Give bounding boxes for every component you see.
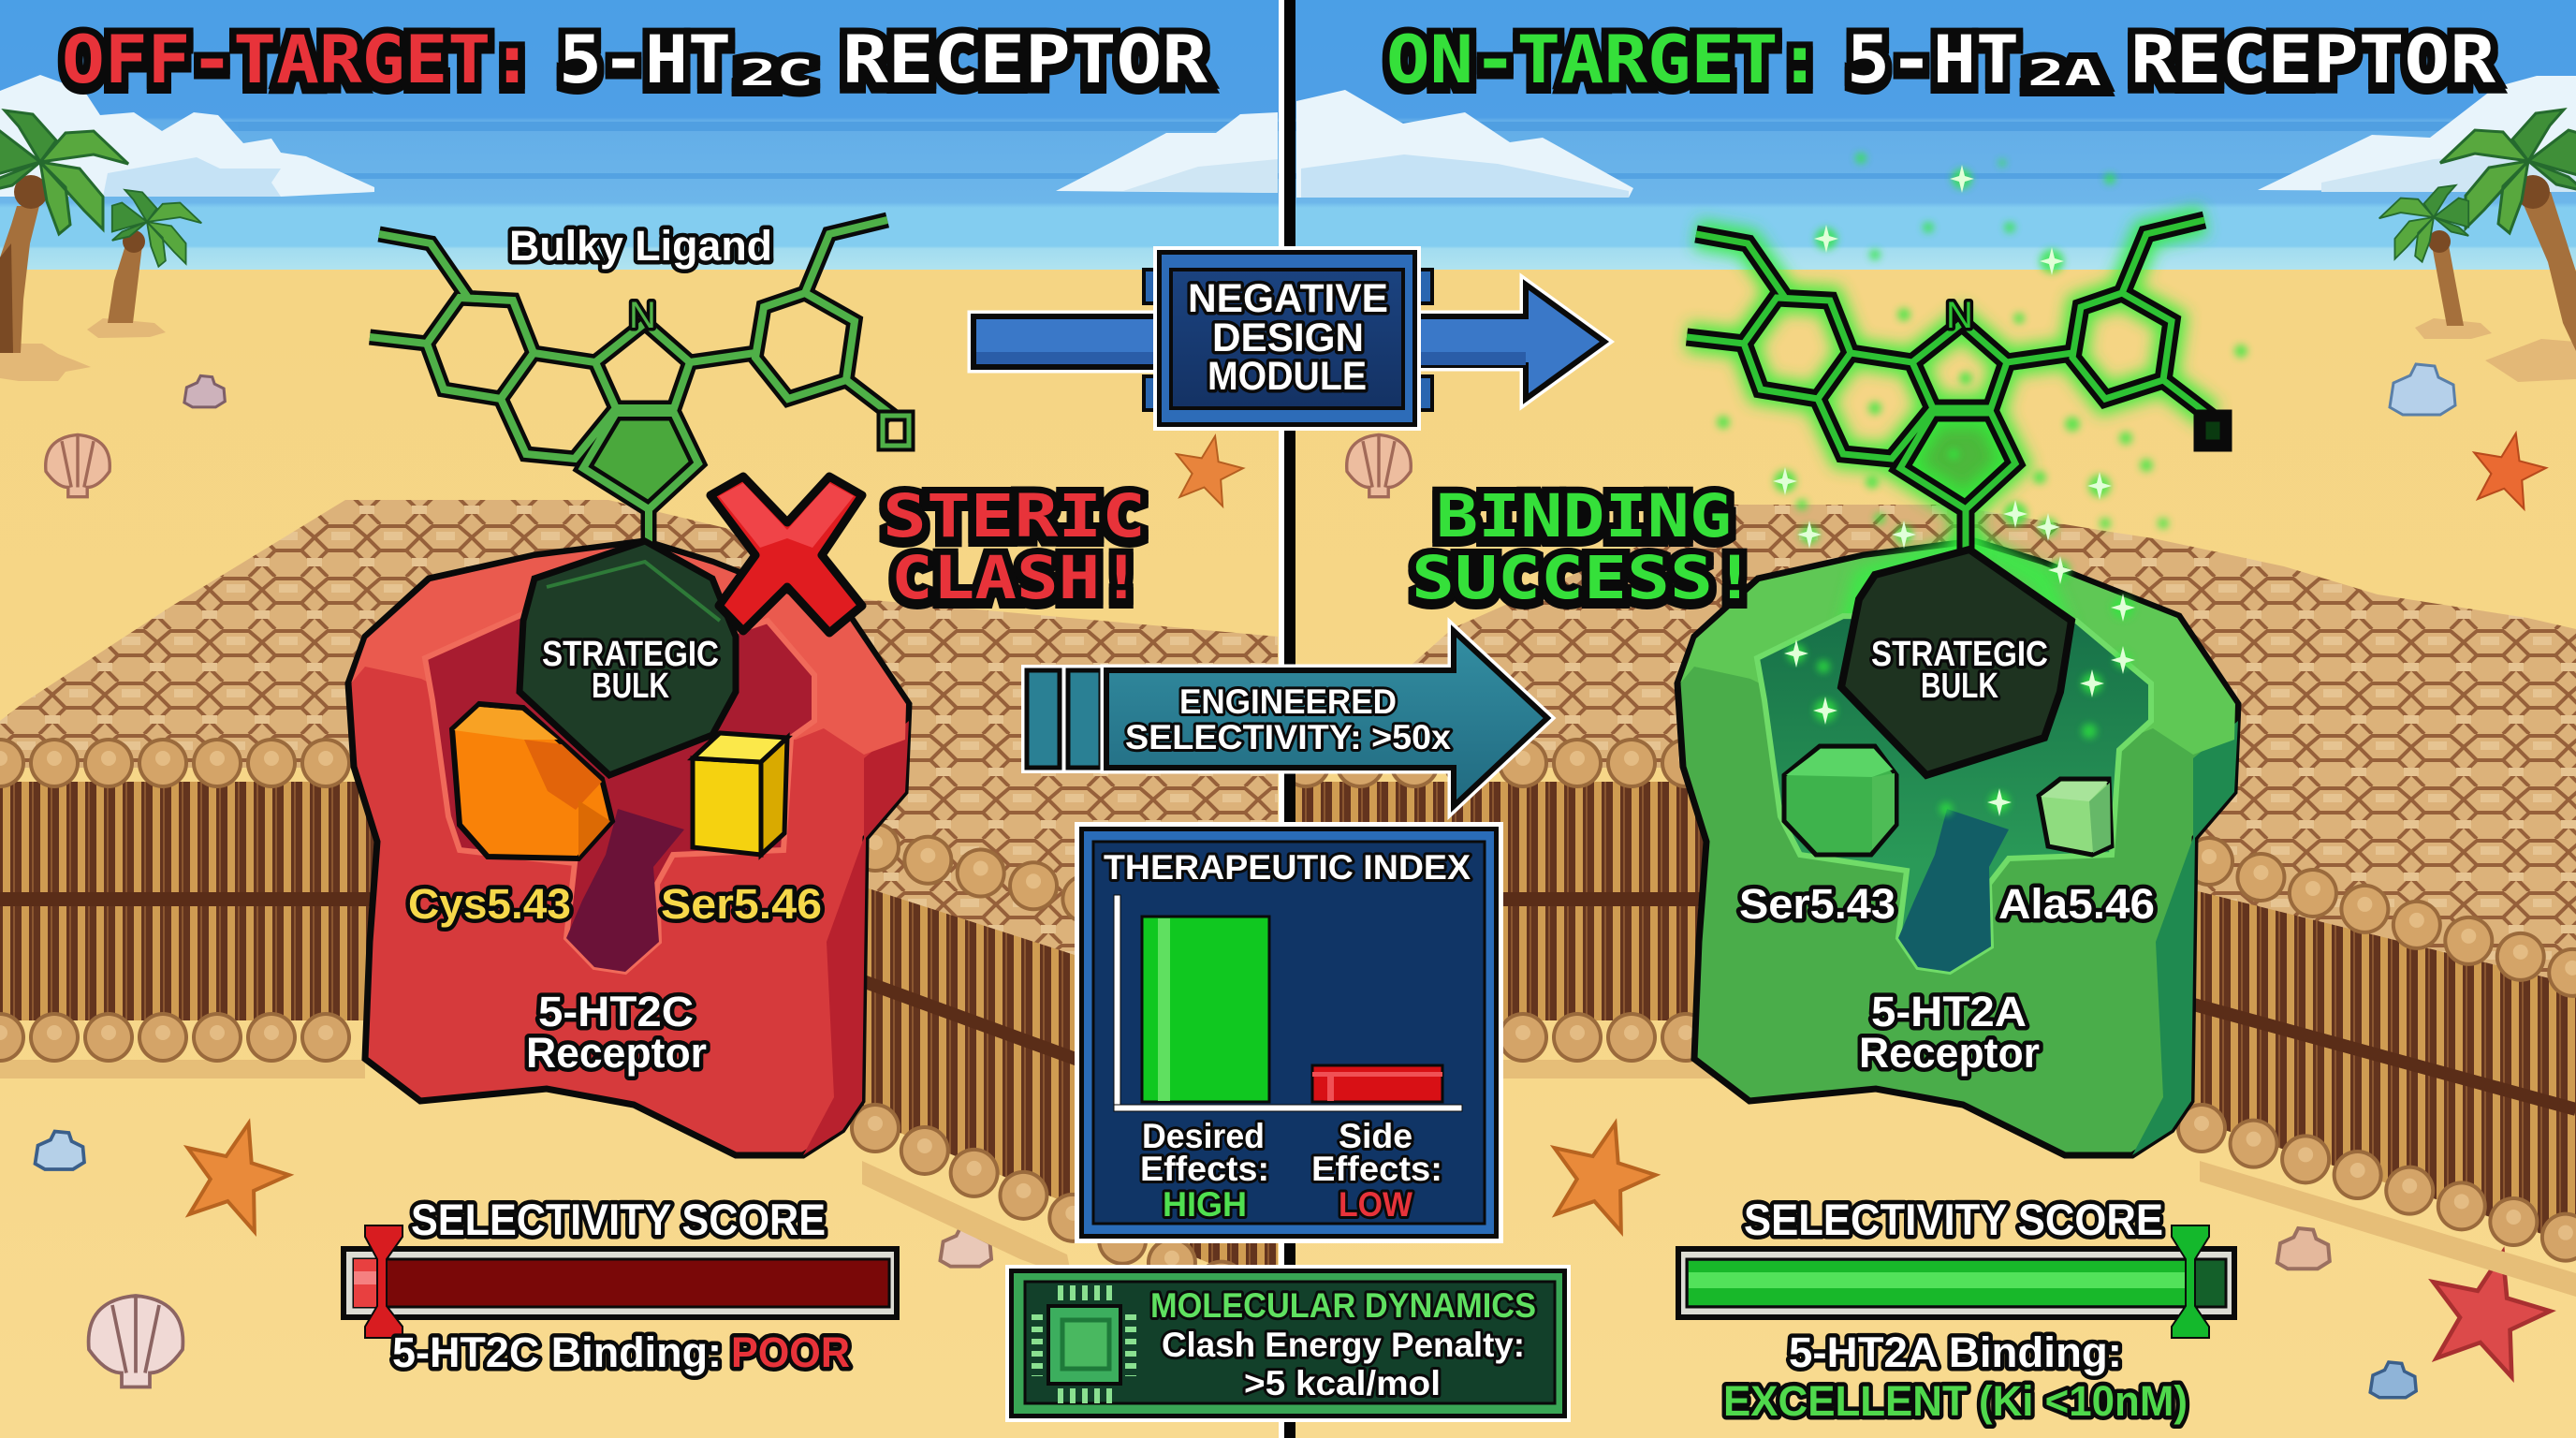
label: 5-HT2A binding excellent [1723,1328,2188,1425]
nitrogen label: N [629,295,656,336]
ligand: bulky ligand left [370,220,909,562]
gauge: selectivity bar left [341,1225,900,1338]
label: 5-HT2C binding poor: 5-HT2C Binding: [392,1328,722,1376]
background: sky [0,0,2576,273]
clouds [0,75,2576,198]
label: 5-HT2A receptor: 5-HT2A [1871,988,2027,1035]
gauge marker [365,1225,402,1338]
binding pocket [425,612,814,972]
label: selectivity score right: SELECTIVITY SCORE [1744,1195,2163,1244]
residue: Cys5.43 orange block [452,704,612,858]
label: Ala5.46: Ala5.46 [1998,880,2155,928]
icon: microchip [1037,1293,1131,1396]
title: on-target: ON-TARGET: [1386,22,1822,98]
membrane: right panel lipid bilayer [1288,505,2576,1297]
label: 5-HT2A binding excellent: EXCELLENT (Ki <10nM) [1723,1377,2188,1425]
title: off-target [62,22,1208,98]
bar chart [1114,895,1462,1111]
title: off-target: 2C [739,52,813,94]
title: off-target: RECEPTOR [842,22,1208,98]
palm trees left [0,110,201,381]
label: 5-HT2C receptor [526,988,707,1077]
callout: binding success: BINDING [1436,482,1732,550]
label: Ser5.43: Ser5.43 [1739,880,1895,928]
label: 5-HT2A binding excellent: 5-HT2A Binding: [1789,1328,2122,1376]
label: 5-HT2A receptor: Receptor [1859,1029,2040,1077]
module text: NEGATIVE [1188,276,1388,321]
title: off-target: OFF-TARGET: [62,22,534,98]
callout: binding success [1412,482,1756,612]
title: on-target [1386,22,2496,98]
center divider line [1279,0,1295,1438]
label: side effects low [1311,1117,1442,1224]
label: 5-HT2A receptor [1859,988,2040,1077]
arrow text: SELECTIVITY: >50x [1125,718,1451,756]
label: Ser5.46: Ser5.46 [661,880,822,928]
callout: steric clash [883,482,1146,612]
callout: steric clash: CLASH! [891,544,1142,612]
background: sea and sky bands [225,122,2576,179]
label: bulky ligand: Bulky Ligand [509,222,772,270]
label: Cys5.43: Cys5.43 [408,880,571,928]
callout: steric clash: STERIC [883,482,1146,550]
arrow text [1125,682,1451,756]
text: molecular dynamics: Clash Energy Penalty: [1162,1326,1525,1364]
strategic bulk: left: STRATEGIC [542,635,719,674]
module text [1188,276,1388,399]
terminal atom [2200,416,2226,446]
label: desired effects high: HIGH [1163,1185,1247,1224]
label: 5-HT2C receptor: Receptor [526,1029,707,1077]
text: molecular dynamics: MOLECULAR DYNAMICS [1150,1286,1536,1325]
arrow: blue input bar [973,316,1161,367]
terminal atom [883,416,909,446]
residue: Ser5.43 green block [1784,746,1896,855]
arrow: engineered selectivity [1027,631,1547,806]
channel [1898,809,2009,972]
membrane: left panel lipid bilayer [0,500,1278,1311]
label: desired effects high: Effects: [1140,1150,1269,1188]
title: off-target: 5-HT [559,22,731,98]
strategic bulk: right: BULK [1921,667,1998,706]
strategic bulk: left: BULK [592,667,669,706]
beach shells and starfish, left [36,375,1249,1387]
strategic bulk: right [1841,550,2071,775]
bar: side effects [1312,1065,1442,1102]
label: side effects low: Side [1339,1117,1412,1155]
label: selectivity score left: SELECTIVITY SCORE [411,1195,826,1244]
arrow: blue output arrowhead [1417,285,1604,399]
beach shells and starfish, right [1347,364,2561,1398]
panel: therapeutic index [1075,822,1503,1243]
green glow around bulk [1849,541,2065,775]
label: 5-HT2C receptor: 5-HT2C [538,988,694,1035]
residue: Ser5.46 yellow block [693,733,787,855]
strategic bulk: left [520,541,736,775]
ligand: bulky ligand right glowing [1687,220,2226,562]
text: molecular dynamics [1150,1286,1536,1402]
label: desired effects high: Desired [1142,1117,1265,1155]
nitrogen label: N [1946,295,1973,336]
palm trees right [2379,110,2576,382]
title: on-target: 5-HT [1847,22,2019,98]
text: molecular dynamics: >5 kcal/mol [1244,1364,1441,1402]
gauge: selectivity bar right [1676,1225,2237,1338]
title: on-target: 2A [2027,52,2101,94]
gauge marker [2172,1225,2209,1338]
callout: binding success: SUCCESS! [1412,544,1756,612]
channel [566,809,684,972]
label: side effects low: Effects: [1311,1150,1442,1188]
title: on-target: RECEPTOR [2130,22,2496,98]
residue: Ala5.46 light green block [2039,779,2112,855]
label: desired effects high [1140,1117,1269,1224]
panel: molecular dynamics [1005,1265,1571,1422]
receptor: 5-HT2A green [1677,541,2238,1155]
receptor: 5-HT2C red [348,541,909,1155]
arrow tail stripes [1027,670,1101,768]
arrow text: ENGINEERED [1179,682,1397,721]
panel title: THERAPEUTIC INDEX [1104,848,1471,887]
label: 5-HT2C binding poor: POOR [731,1328,850,1376]
label: side effects low: LOW [1339,1185,1412,1224]
strategic bulk: right: STRATEGIC [1871,635,2048,674]
bar: desired effects [1142,917,1269,1102]
module text: DESIGN [1212,315,1364,360]
icon: red X clash mark [710,477,862,633]
binding pocket [1757,616,2151,972]
sparkles: green glow particles [1717,153,2247,816]
module text: MODULE [1208,354,1367,399]
panel: negative design module [1144,246,1432,431]
